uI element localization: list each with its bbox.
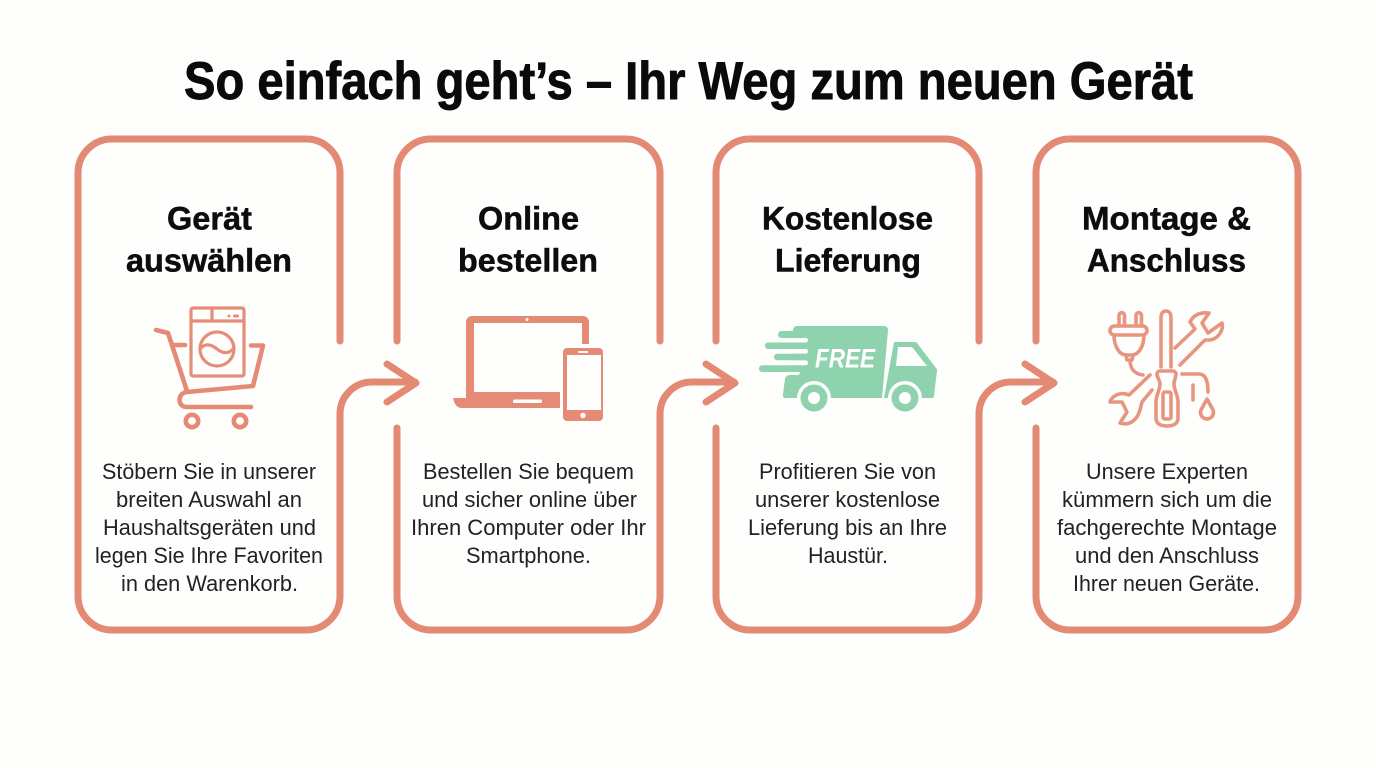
heading: Online: [478, 200, 579, 236]
heading: [762, 200, 933, 278]
body text: Haushaltsgeräten und: [103, 515, 316, 540]
panel: step 3 Kostenlose Lieferung: [716, 139, 1054, 630]
body text: [1057, 459, 1277, 596]
heading: bestellen: [458, 242, 598, 278]
body text: unserer kostenlose: [755, 487, 940, 512]
panel outline with arrow to step 2: [78, 139, 416, 630]
icon: delivery truck FREE: [759, 326, 937, 415]
heading: Kostenlose: [762, 200, 933, 236]
panel: step 2 Online bestellen: [397, 139, 735, 630]
icon: plug, screwdriver and wrenches: [1110, 311, 1222, 426]
panel outline with arrow to step 3: [397, 139, 735, 630]
body text: Ihren Computer oder Ihr: [411, 515, 646, 540]
icon: delivery truck FREE: FREE: [815, 344, 876, 374]
body text: Ihrer neuen Geräte.: [1073, 571, 1260, 596]
panel outline with arrow to step 4: [716, 139, 1054, 630]
body text: fachgerechte Montage: [1057, 515, 1277, 540]
body text: [411, 459, 646, 568]
heading: [1082, 200, 1251, 278]
panel: step 4 Montage und Anschluss: [1036, 139, 1298, 630]
body text: und sicher online über: [422, 487, 637, 512]
heading: Montage &: [1082, 200, 1251, 236]
body text: Stöbern Sie in unserer: [102, 459, 316, 484]
heading: [126, 200, 292, 278]
body text: Bestellen Sie bequem: [423, 459, 634, 484]
body text: Lieferung bis an Ihre: [748, 515, 947, 540]
body text: [95, 459, 323, 596]
body text: in den Warenkorb.: [121, 571, 298, 596]
heading: Anschluss: [1087, 242, 1246, 278]
body text: und den Anschluss: [1075, 543, 1259, 568]
body text: Smartphone.: [466, 543, 591, 568]
panel outline: [1036, 139, 1298, 630]
heading: Lieferung: [775, 242, 921, 278]
heading: Gerät: [167, 200, 252, 236]
body text: legen Sie Ihre Favoriten: [95, 543, 323, 568]
body text: Haustür.: [808, 543, 888, 568]
body text: Profitieren Sie von: [759, 459, 936, 484]
body text: Unsere Experten: [1086, 459, 1248, 484]
icon: shopping cart with washing machine: [156, 308, 263, 427]
panel: step 1 Gerät auswählen: [78, 139, 416, 630]
heading: auswählen: [126, 242, 292, 278]
body text: kümmern sich um die: [1062, 487, 1272, 512]
body text: breiten Auswahl an: [116, 487, 302, 512]
body text: [748, 459, 947, 568]
title: So einfach geht’s – Ihr Weg zum neuen Gerät: [184, 52, 1193, 111]
icon: laptop and smartphone: [453, 316, 603, 421]
heading: [458, 200, 598, 278]
